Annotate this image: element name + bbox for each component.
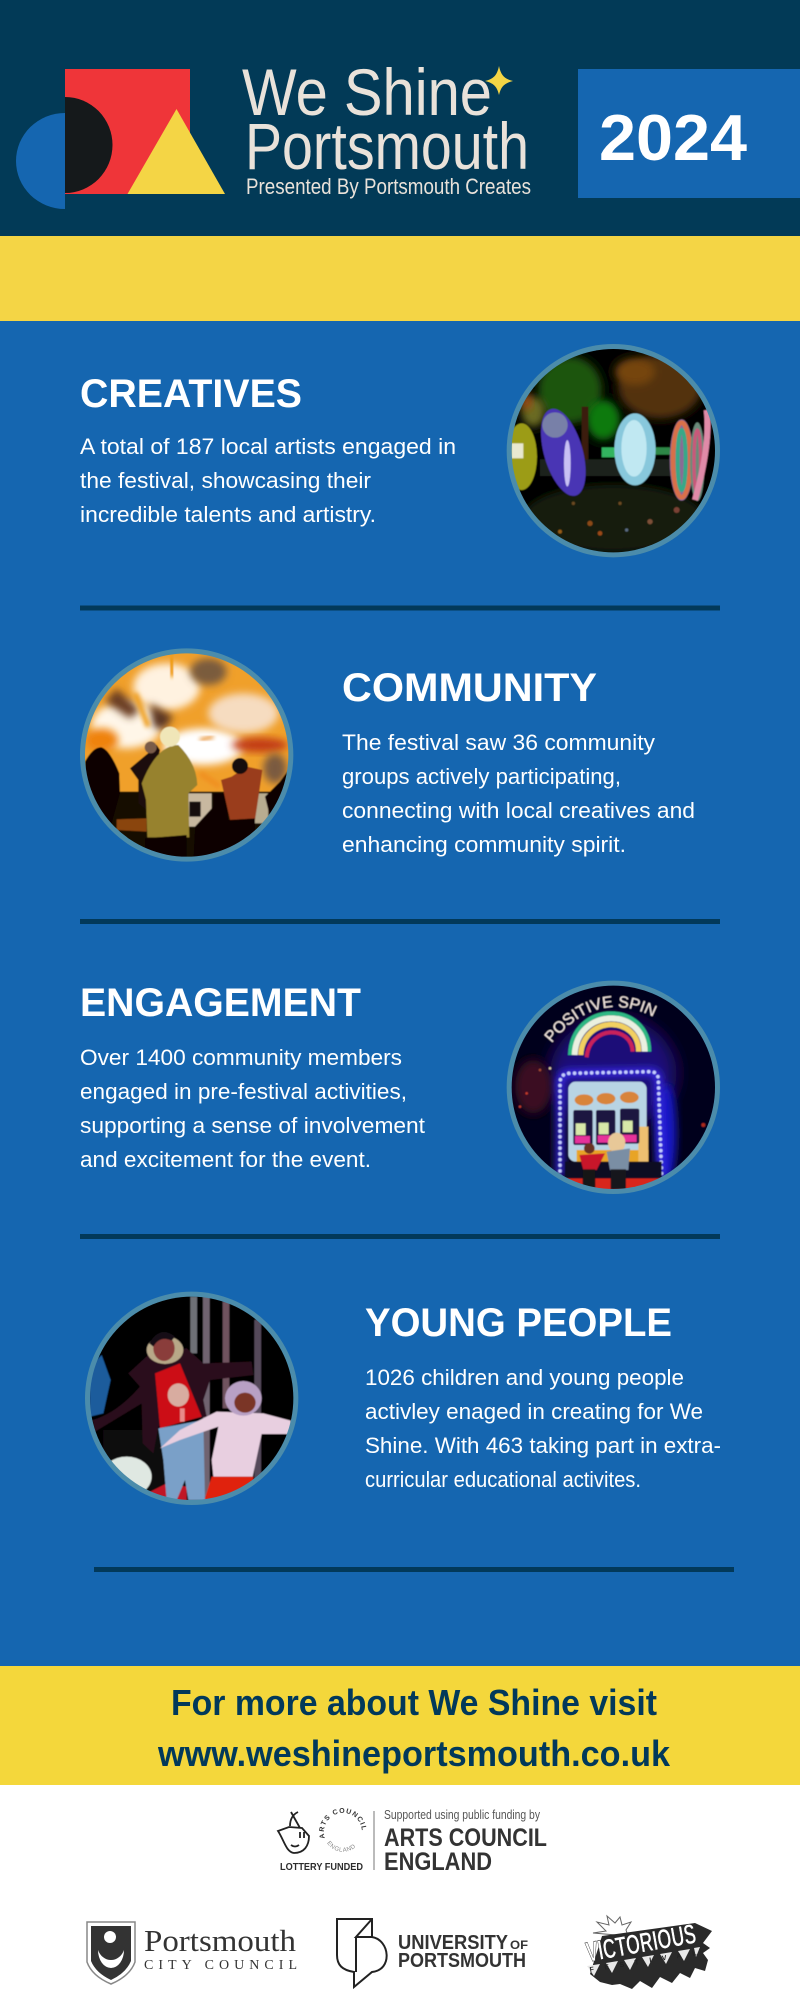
call to action band: www.weshineportsmouth.co.uk	[157, 1733, 671, 1774]
text block: community: enhancing community spirit.	[342, 832, 626, 857]
poles	[190, 1297, 197, 1353]
logo: arts council england: LOTTERY FUNDED	[280, 1861, 363, 1873]
text block: creatives	[80, 434, 456, 527]
text block: community	[342, 730, 695, 857]
text block: creatives: incredible talents and artistry.	[80, 502, 376, 527]
panel: engagement	[80, 980, 720, 1194]
text block: engagement: supporting a sense of involvement	[80, 1113, 425, 1138]
logo: university of portsmouth	[337, 1919, 528, 1987]
divider 2	[80, 919, 720, 924]
text block: engagement: and excitement for the event.	[80, 1147, 371, 1172]
logo: arts council england: ARTS COUNCIL	[384, 1824, 547, 1852]
divider 4	[94, 1567, 734, 1572]
icon: sunburst	[593, 1916, 631, 1936]
call to action band: For more about We Shine visit	[171, 1682, 657, 1723]
divider 1	[80, 606, 720, 610]
logo wordmark: Presented By Portsmouth Creates	[246, 174, 531, 199]
logo: arts council england: ENGLAND	[384, 1848, 492, 1876]
logo: portsmouth city council: CITY COUNCIL	[144, 1958, 297, 1973]
woman	[93, 1348, 253, 1453]
neon sign text: POSITIVE SPIN	[543, 995, 658, 1044]
panel: young people	[85, 1292, 721, 1507]
call to action band	[0, 1666, 800, 1785]
white disc and red floor	[111, 1456, 153, 1490]
light frame	[560, 1072, 662, 1177]
heading: young people: YOUNG PEOPLE	[365, 1301, 672, 1345]
icon: arts council ring: ARTS COUNCIL	[319, 1808, 366, 1838]
text block: creatives: A total of 187 local artists engaged in	[80, 434, 456, 459]
logo wordmark: Portsmouth	[245, 109, 529, 183]
text block: young people: Shine. With 463 taking part in extra-	[365, 1433, 721, 1458]
panel: community	[80, 648, 695, 865]
sponsor logos strip	[0, 1785, 800, 2000]
icon: star	[485, 66, 513, 95]
logo mark: geometric shapes	[16, 69, 225, 209]
text block: young people	[365, 1365, 721, 1492]
rainbow arch	[570, 1013, 649, 1055]
logo: victorious festival	[584, 1916, 712, 1989]
logo: portsmouth city council	[87, 1922, 297, 1984]
photo: positive spin slot machine	[506, 980, 720, 1194]
text block: engagement: engaged in pre-festival activities,	[80, 1079, 407, 1104]
sawtooth shadow block	[590, 1923, 712, 1989]
text block: creatives: the festival, showcasing their	[80, 468, 371, 493]
header band	[0, 0, 800, 236]
heading: engagement: ENGAGEMENT	[80, 981, 361, 1025]
crowd	[83, 747, 120, 830]
logo: arts council england	[276, 1807, 547, 1876]
heading: creatives: CREATIVES	[80, 372, 302, 416]
text block: community: connecting with local creatives and	[342, 798, 695, 823]
text block: community: groups actively participating,	[342, 764, 621, 789]
floor and children	[565, 1162, 662, 1178]
text block: community: The festival saw 36 community	[342, 730, 655, 755]
logo: portsmouth city council: Portsmouth	[144, 1923, 297, 1958]
text block: engagement: Over 1400 community members	[80, 1045, 402, 1070]
side person	[90, 1355, 111, 1417]
logo: arts council england: Supported using public funding by	[384, 1807, 540, 1822]
logo wordmark: We Shine	[242, 55, 492, 129]
photo: light hoops in park	[506, 343, 720, 557]
yellow band	[0, 236, 800, 321]
logo: victorious festival: VICTORIOUS	[584, 1918, 698, 1968]
child	[160, 1412, 291, 1477]
text block: young people: curricular educational activites.	[365, 1467, 641, 1492]
icon: shield	[87, 1922, 135, 1984]
icon: university mark	[337, 1919, 387, 1987]
icon: lottery crossed fingers	[278, 1812, 309, 1853]
divider 3	[80, 1234, 720, 1239]
text block: young people: 1026 children and young people	[365, 1365, 684, 1390]
year badge	[578, 69, 800, 198]
logo: university of portsmouth: PORTSMOUTH	[398, 1950, 526, 1972]
machine panel	[568, 1082, 647, 1162]
icon: arts council ring: ENGLAND	[327, 1840, 355, 1852]
panel: creatives	[80, 343, 720, 557]
text block: young people: activley enaged in creating for We	[365, 1399, 703, 1424]
festival bunting: FESTIVAL	[589, 1950, 698, 1974]
year badge: 2024	[599, 101, 747, 174]
heading: community: COMMUNITY	[342, 666, 597, 710]
photo: crowd watching projection	[80, 648, 293, 865]
photo: woman and child at night	[85, 1292, 298, 1507]
logo: university of portsmouth: OF	[510, 1938, 528, 1952]
icon: arts council ring	[319, 1808, 366, 1852]
logo wordmark	[242, 55, 531, 199]
logo: university of portsmouth: UNIVERSITY	[398, 1932, 509, 1954]
text block: engagement	[80, 1045, 425, 1172]
